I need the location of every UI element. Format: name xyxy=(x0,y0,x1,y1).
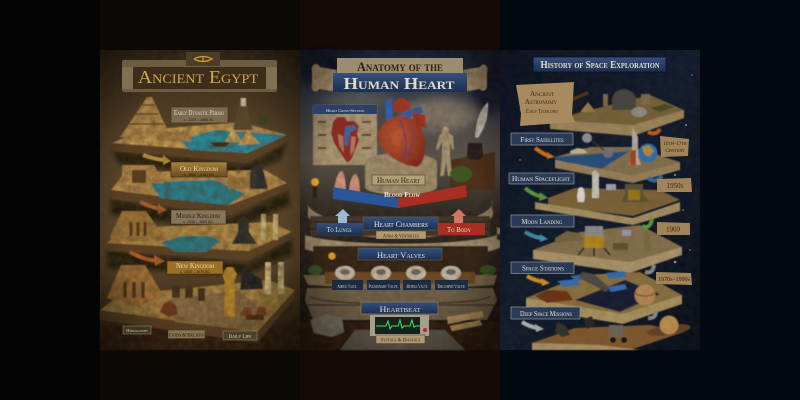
human heart label: Human Heart xyxy=(377,176,420,185)
label: Middle Kingdom: c. 2055 – 1650 BC xyxy=(183,220,213,224)
title plaque: Human Heart xyxy=(344,74,454,93)
stone base courses xyxy=(305,288,497,320)
date: 1970s-1990s xyxy=(656,272,692,285)
heart valves label xyxy=(358,248,442,260)
atria and ventricles label xyxy=(376,231,426,240)
to lungs label xyxy=(317,209,362,235)
date: 16th-17th century: 16th–17th xyxy=(663,142,687,147)
flame xyxy=(328,252,336,260)
stone texture xyxy=(300,50,500,350)
heart panel background xyxy=(300,50,500,350)
pedestal xyxy=(365,153,437,195)
arrows between tiers xyxy=(130,155,171,266)
scroll: ancient astronomy: Astronomy xyxy=(525,98,557,106)
valve labels: Pulmonary Valve xyxy=(368,285,398,290)
date: 1950s xyxy=(657,178,692,192)
valves xyxy=(335,266,461,280)
to body label xyxy=(438,209,485,235)
label: Space Stations: Space Stations xyxy=(522,264,564,272)
heart chambers label: Heart Chambers xyxy=(374,220,428,229)
panel: Anatomy of the Human Heart xyxy=(300,50,510,350)
cross-section header xyxy=(313,105,377,114)
label: Daily Life xyxy=(223,331,257,340)
wall texture xyxy=(100,50,300,350)
human statue xyxy=(436,127,454,176)
platform: deep space xyxy=(532,316,691,350)
lower wall xyxy=(313,246,488,284)
edge vignette xyxy=(100,50,300,350)
tier one stone xyxy=(308,199,493,238)
heart chambers label xyxy=(363,217,438,230)
platform: space stations xyxy=(526,271,682,324)
label: Old Kingdom: c. 2686 – 2181 BC xyxy=(184,173,214,177)
label: Hieroglyphs: Hieroglyphs xyxy=(126,328,148,333)
rock xyxy=(310,314,344,337)
space labels xyxy=(509,57,692,319)
label: Middle Kingdom: Middle Kingdom xyxy=(176,212,220,220)
edge vignette xyxy=(300,50,500,350)
heartbeat label: Heartbeat xyxy=(380,304,421,314)
wooden shelf xyxy=(325,272,475,284)
wooden floor xyxy=(100,325,300,350)
title plaque: Ancient Egypt xyxy=(138,67,258,87)
platform: astronomy xyxy=(550,89,684,136)
panel: Ancient Egypt xyxy=(100,50,300,350)
label: New Kingdom: c. 1550 – 1070 BC xyxy=(180,270,210,274)
systole and diastole label: Systole & Diastole xyxy=(380,338,421,344)
lungs xyxy=(334,171,360,192)
quill and ink xyxy=(467,102,488,160)
label: Middle Kingdom xyxy=(171,210,226,224)
torch xyxy=(311,178,319,198)
egypt scene xyxy=(100,97,300,350)
title banner xyxy=(533,57,666,72)
anatomical heart xyxy=(378,98,426,167)
valve labels: Aortic Valve xyxy=(338,285,357,290)
clouds xyxy=(301,52,510,131)
date: 1969: 1969 xyxy=(666,226,680,234)
title plaque: Anatomy of the xyxy=(357,60,443,74)
scroll: ancient astronomy xyxy=(516,82,575,126)
panel background wall xyxy=(100,50,300,350)
title plaque xyxy=(333,58,467,93)
label: Deep Space Missions xyxy=(511,307,580,319)
label: Hieroglyphs xyxy=(123,326,151,334)
label: First Satellites: First Satellites xyxy=(520,135,564,144)
platform: moon landing xyxy=(533,225,682,273)
label: Space Stations xyxy=(511,262,574,274)
label: Human Spaceflight: Human Spaceflight xyxy=(512,175,570,183)
platform shadows xyxy=(107,142,292,275)
label: Deep Space Missions: Deep Space Missions xyxy=(520,310,572,318)
stars xyxy=(519,65,693,299)
to body label: To Body xyxy=(447,226,471,234)
platform: Middle Kingdom xyxy=(107,211,292,259)
moss xyxy=(480,265,496,275)
label: Gods & Beliefs xyxy=(168,330,205,338)
label: Moon Landing: Moon Landing xyxy=(522,218,563,226)
to lungs label: To Lungs xyxy=(326,226,352,234)
title scroll right xyxy=(463,64,488,92)
label: Moon Landing xyxy=(511,215,574,227)
label: Early Dynastic Period xyxy=(171,107,228,123)
cross-section heart card xyxy=(313,105,377,165)
valve labels: Mitral Valve xyxy=(406,285,428,290)
terrain texture xyxy=(500,50,700,350)
green moss xyxy=(450,166,472,182)
arrows between tiers xyxy=(520,109,662,332)
space scene xyxy=(520,89,691,350)
label: New Kingdom: New Kingdom xyxy=(176,262,215,270)
platform: first satellites xyxy=(555,128,680,183)
scroll: ancient astronomy: Ancient xyxy=(530,90,554,98)
tier two ledge xyxy=(305,227,503,259)
valve labels: Tricuspid Valve xyxy=(437,285,465,290)
platform: Early Dynastic xyxy=(112,97,287,162)
heart labels xyxy=(313,58,485,344)
heart valves label: Heart Valves xyxy=(377,250,425,260)
valve labels xyxy=(332,280,468,290)
heart scene xyxy=(300,64,503,350)
systole and diastole label xyxy=(376,335,425,344)
scroll: ancient astronomy: Early Telescopes xyxy=(526,109,558,115)
atria and ventricles label: Atria & Ventricles xyxy=(383,234,419,240)
label: Human Spaceflight xyxy=(509,173,574,184)
title scroll left xyxy=(311,64,337,92)
blood flow ribbon xyxy=(333,185,467,208)
platform: human spaceflight xyxy=(535,170,680,225)
date: 1950s: 1950s xyxy=(667,182,684,190)
space background xyxy=(500,50,700,350)
tier three ledge xyxy=(303,275,497,291)
label: Gods & Beliefs: Gods & Beliefs xyxy=(169,334,204,338)
label: First Satellites xyxy=(511,133,573,145)
date: 1970s-1990s: 1970s–1990s xyxy=(658,277,690,283)
platform: New Kingdom xyxy=(100,262,295,343)
date: 16th-17th century: Century xyxy=(665,149,685,154)
cross-section header: Heart Cross-Section xyxy=(326,108,365,113)
floor xyxy=(300,322,500,350)
stone table xyxy=(450,152,495,190)
egypt labels xyxy=(122,52,277,340)
heartbeat label xyxy=(361,302,438,314)
date: 1969 xyxy=(657,222,690,235)
title banner: History of Space Exploration xyxy=(540,60,660,71)
panel: History of Space Exploration xyxy=(500,50,700,350)
label: Daily Life: Daily Life xyxy=(228,335,252,340)
brick wall tier xyxy=(310,216,490,236)
label: Early Dynastic Period: Early Dynastic Period xyxy=(174,109,224,117)
label: New Kingdom xyxy=(167,261,223,274)
heart monitor xyxy=(370,315,429,336)
label: Old Kingdom: Old Kingdom xyxy=(180,164,219,173)
date: 16th-17th century xyxy=(660,136,689,157)
platform: Old Kingdom xyxy=(111,165,287,214)
label: Early Dynastic Period: c. 3100 – 2686 BC xyxy=(184,118,214,122)
title plaque xyxy=(122,52,277,92)
scrolls xyxy=(447,311,484,331)
label: Old Kingdom xyxy=(171,162,227,177)
blood flow ribbon: Blood Flow xyxy=(384,190,420,199)
